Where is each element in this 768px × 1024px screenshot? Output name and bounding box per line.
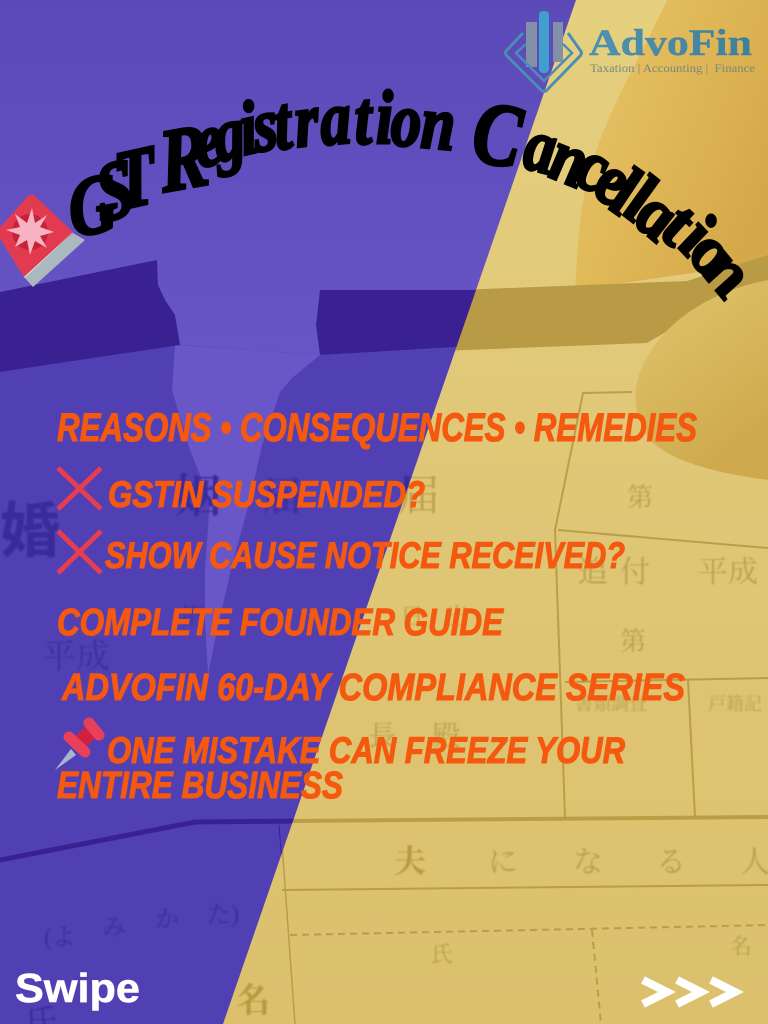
form kanji text: 夫	[394, 843, 426, 879]
form kanji text	[236, 474, 768, 1020]
form kanji text: 出	[445, 604, 469, 631]
purple kanji: 届	[398, 474, 440, 520]
tape strip	[440, 255, 768, 351]
form kanji text: 平成	[698, 556, 758, 589]
dark line	[0, 821, 300, 860]
logo name: AdvoFin	[589, 23, 752, 64]
title: curved heading: ancellation	[519, 101, 764, 315]
form kanji text: に	[488, 846, 518, 879]
purple kanji: 第	[180, 604, 204, 631]
form kanji text: 追	[578, 556, 608, 589]
icon: finger lobe	[635, 280, 768, 480]
form kanji text: 第	[627, 483, 653, 512]
form kanji text: 第	[620, 627, 646, 656]
panel: purple diagonal overlay	[0, 0, 600, 1024]
text block: orange headlines	[55, 406, 697, 807]
form kanji text: る	[656, 846, 686, 879]
title: curved heading: GST	[64, 114, 164, 256]
logo: AdvoFin	[506, 11, 755, 92]
swipe label: Swipe	[15, 965, 140, 1011]
line: show cause: SHOW CAUSE NOTICE RECEIVED?	[105, 535, 625, 576]
form kanji text: 名	[730, 934, 752, 959]
line: mistake: ONE MISTAKE CAN FREEZE YOUR	[107, 730, 625, 771]
form kanji text: な	[573, 846, 603, 879]
purple kanji	[0, 471, 440, 1024]
form kanji text: 日	[400, 605, 424, 631]
purple kanji: か	[155, 907, 179, 933]
lower paper	[0, 345, 456, 1024]
form kanji text: 名	[236, 982, 270, 1020]
line: founder guide: COMPLETE FOUNDER GUIDE	[57, 602, 504, 644]
form kanji text: 殿	[432, 721, 460, 752]
icon: cross 1	[58, 468, 101, 509]
purple kanji: 届	[262, 474, 302, 519]
tear gap	[172, 345, 320, 675]
tape left	[0, 260, 180, 372]
logo tagline: Taxation | Accounting | Finance	[590, 61, 755, 75]
icon: red book emoji	[0, 195, 85, 287]
title: curved heading: egistration	[189, 75, 477, 184]
icon: cross 2	[58, 531, 101, 573]
title: curved heading: C	[468, 80, 528, 188]
form kanji text: 氏	[431, 942, 453, 967]
icon: pushpin	[55, 723, 99, 770]
form kanji text: 書類調査	[575, 694, 647, 714]
tape right	[316, 290, 480, 355]
purple kanji: 婚	[0, 483, 60, 570]
arrow: chevrons	[643, 980, 735, 1004]
form kanji text: 付	[620, 556, 650, 589]
form lines	[281, 392, 768, 1024]
line: suspended: GSTIN SUSPENDED?	[108, 474, 425, 515]
purple kanji: (よ	[44, 925, 76, 951]
form kanji text: 長	[368, 721, 396, 752]
icon: logo bars and diamond	[506, 11, 582, 92]
form kanji text: 戸籍記	[708, 694, 762, 714]
purple kanji: 平成	[42, 638, 110, 676]
title: curved heading: R	[153, 104, 213, 212]
purple kanji: 姻	[175, 471, 221, 522]
icon: finger top	[575, 0, 768, 290]
purple kanji: た)	[207, 902, 239, 928]
form kanji text: 届	[398, 474, 440, 520]
line: entire business: ENTIRE BUSINESS	[57, 765, 343, 807]
purple kanji: み	[102, 915, 126, 941]
